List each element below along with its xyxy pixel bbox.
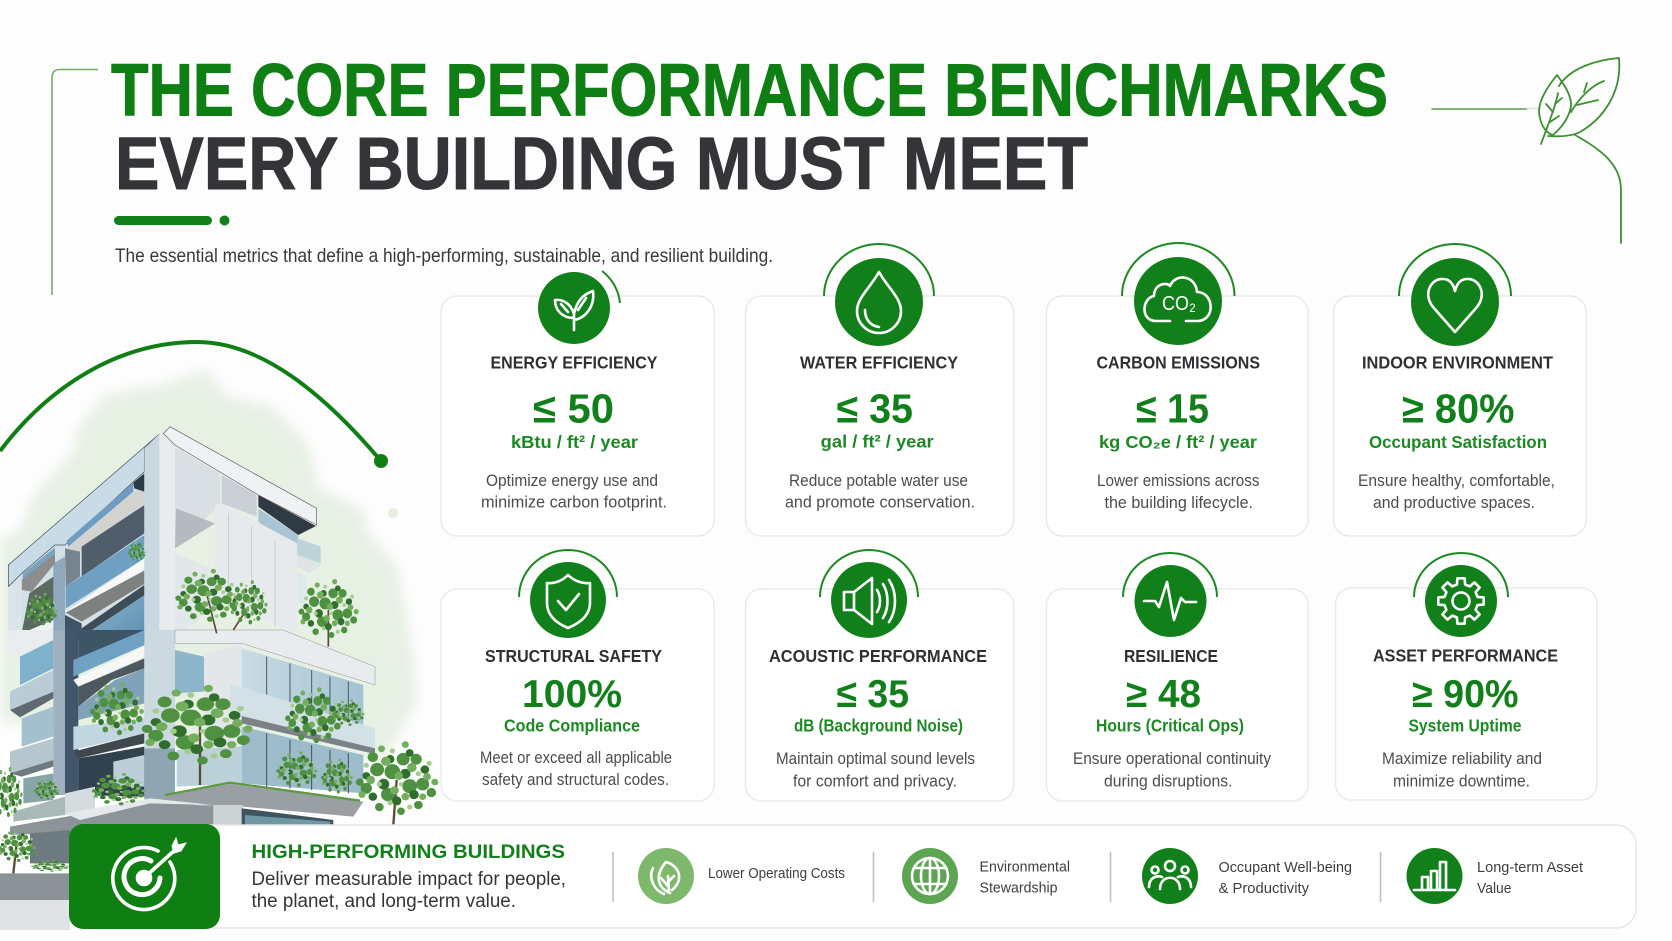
metric title: INDOOR ENVIRONMENT — [1362, 352, 1553, 372]
description: the building lifecycle. — [1104, 493, 1253, 512]
description: Reduce potable water use — [789, 471, 968, 490]
metric unit: Hours (Critical Ops) — [1096, 716, 1244, 736]
card: energy efficiency — [441, 271, 714, 536]
building upper floors — [8, 427, 322, 640]
icon: people — [1142, 848, 1198, 904]
icon: speaker — [820, 550, 918, 638]
metric unit: Code Compliance — [504, 716, 640, 736]
benefit label: Occupant Well-being — [1218, 859, 1352, 876]
header frame line — [52, 70, 98, 295]
description: minimize carbon footprint. — [481, 492, 667, 512]
subtitle: The essential metrics that define a high-performing, sustainable, and resilient building. — [115, 245, 773, 267]
card: water efficiency — [746, 244, 1014, 536]
benefit label: Lower Operating Costs — [708, 865, 845, 882]
description — [785, 471, 975, 512]
metric unit: System Uptime — [1408, 716, 1522, 736]
icon: globe — [902, 848, 958, 904]
icon: shield — [519, 550, 617, 638]
metric unit: gal / ft² / year — [821, 432, 934, 452]
benefit: lower operating costs — [638, 848, 845, 904]
banner text — [252, 869, 566, 912]
metric title: CARBON EMISSIONS — [1096, 352, 1260, 372]
description — [776, 749, 975, 790]
description: Lower emissions across — [1097, 471, 1260, 490]
target badge — [69, 824, 220, 929]
title: THE CORE PERFORMANCE BENCHMARKS — [111, 48, 1388, 132]
metric title: STRUCTURAL SAFETY — [485, 646, 662, 666]
metric value: ≤ 35 — [836, 673, 909, 716]
description — [1382, 749, 1542, 790]
description — [480, 748, 672, 789]
icon: heart — [1399, 244, 1511, 346]
card: structural safety — [441, 550, 714, 801]
metric value: ≤ 50 — [533, 386, 614, 432]
metric value: 100% — [522, 673, 622, 716]
description: for comfort and privacy. — [793, 772, 957, 790]
title: EVERY BUILDING MUST MEET — [115, 122, 1088, 205]
metric value: ≤ 35 — [836, 386, 913, 432]
benefit: occupant well-being — [1142, 848, 1352, 904]
icon: leaf — [538, 271, 620, 344]
watercolor wash — [0, 370, 417, 770]
metric unit: kg CO₂e / ft² / year — [1099, 432, 1257, 452]
card: resilience — [1046, 553, 1308, 801]
banner text: Deliver measurable impact for people, — [252, 869, 566, 890]
description: Meet or exceed all applicable — [480, 748, 672, 767]
benefit label: Environmental — [980, 858, 1070, 876]
metric title: RESILIENCE — [1124, 646, 1218, 666]
metric title: ASSET PERFORMANCE — [1373, 646, 1558, 666]
icon: CO2 cloud — [1122, 243, 1234, 345]
card: indoor environment — [1334, 244, 1586, 536]
description — [481, 471, 667, 512]
illustration: green building with watercolor wash — [0, 370, 438, 930]
metric value: ≥ 90% — [1412, 673, 1518, 716]
metric value: ≥ 80% — [1402, 386, 1514, 432]
description: Maintain optimal sound levels — [776, 749, 975, 768]
benefit label — [1218, 859, 1352, 897]
benefit label — [1477, 859, 1584, 897]
metric value: ≤ 15 — [1136, 386, 1209, 432]
card: asset performance — [1336, 553, 1597, 800]
benefit label: & Productivity — [1218, 880, 1309, 897]
description: Ensure operational continuity — [1073, 749, 1271, 768]
icon: leaf — [638, 848, 694, 904]
benefit label: Stewardship — [980, 880, 1058, 896]
benefit label: Long-term Asset — [1477, 859, 1584, 876]
metric value: ≥ 48 — [1126, 673, 1201, 716]
icon: bar chart — [1406, 848, 1462, 904]
description: and productive spaces. — [1373, 493, 1535, 512]
description: minimize downtime. — [1393, 772, 1530, 790]
metric unit: Occupant Satisfaction — [1369, 432, 1547, 452]
banner heading: HIGH-PERFORMING BUILDINGS — [252, 841, 565, 863]
description: safety and structural codes. — [482, 770, 669, 789]
metric unit: dB (Background Noise) — [794, 716, 963, 736]
description: Optimize energy use and — [486, 471, 658, 490]
icon: decorative leaf line art — [1432, 58, 1621, 243]
banner text: the planet, and long-term value. — [252, 891, 516, 912]
description — [1358, 471, 1555, 512]
description: and promote conservation. — [785, 492, 975, 512]
upper terrace trees — [26, 541, 359, 647]
metric title: ACOUSTIC PERFORMANCE — [769, 646, 987, 666]
card: carbon emissions — [1046, 243, 1308, 536]
metric unit: kBtu / ft² / year — [511, 432, 638, 452]
lower terrace trees — [0, 682, 438, 873]
description — [1073, 749, 1271, 790]
description: Ensure healthy, comfortable, — [1358, 471, 1555, 490]
building lower floors — [0, 630, 375, 930]
icon: pulse — [1123, 553, 1217, 637]
arc with end dot — [0, 342, 388, 468]
description — [1097, 471, 1260, 512]
title — [111, 48, 1388, 205]
bottom banner panel — [69, 824, 1636, 929]
card: acoustic performance — [746, 550, 1014, 801]
benefit label: Value — [1477, 880, 1512, 897]
icon: CO2 cloud: CO₂ — [1162, 293, 1196, 315]
benefit: long-term asset value — [1406, 848, 1584, 904]
title accent bar — [114, 216, 230, 226]
description: during disruptions. — [1104, 772, 1232, 790]
description: Maximize reliability and — [1382, 749, 1542, 768]
icon: water drop — [824, 244, 934, 346]
benefit: environmental stewardship — [902, 848, 1070, 904]
icon: gear — [1414, 553, 1508, 637]
metric title: WATER EFFICIENCY — [800, 352, 958, 372]
metric title: ENERGY EFFICIENCY — [490, 352, 658, 372]
icon: target with arrow — [113, 838, 186, 910]
benefit label — [980, 858, 1070, 896]
